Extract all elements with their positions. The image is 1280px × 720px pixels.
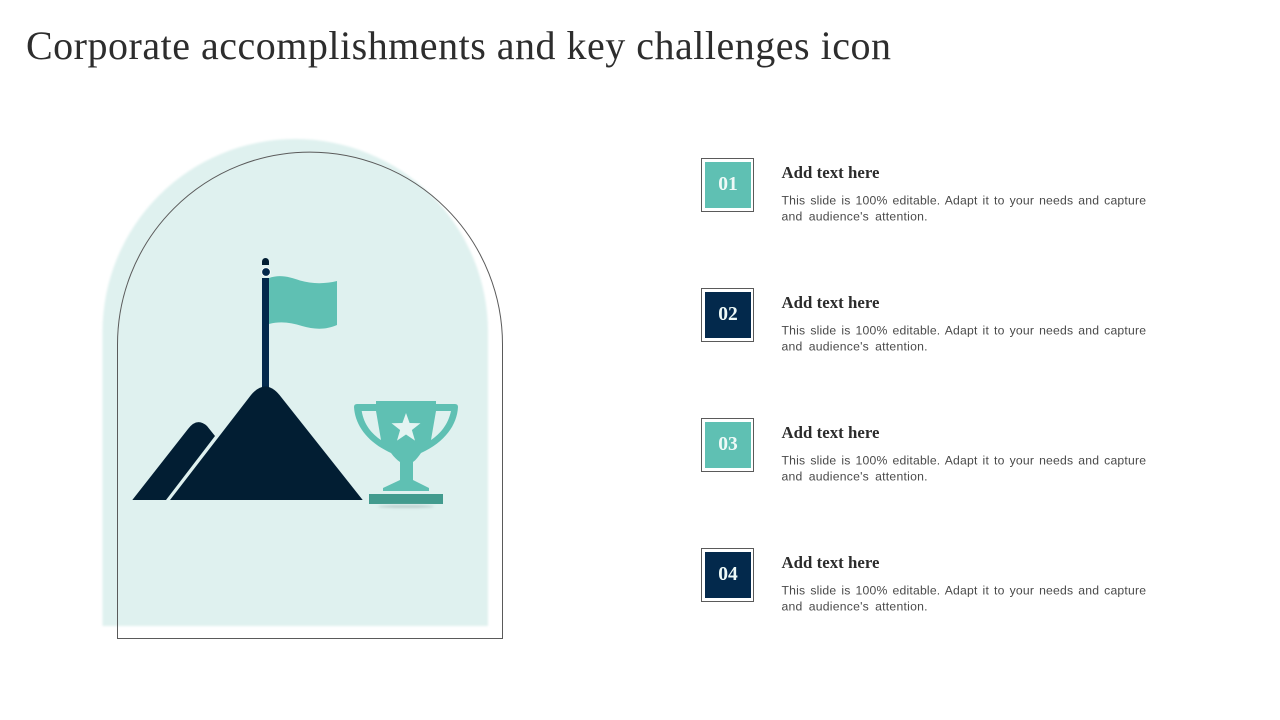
trophy star: [392, 413, 420, 441]
body text 03: This slide is 100% editable. Adapt it to your needs and capture: [782, 454, 1146, 468]
number box 02: 02: [718, 304, 738, 325]
flagpole: [262, 278, 269, 390]
heading 03: Add text here: [782, 423, 880, 442]
body text 03: and audience's attention.: [782, 470, 928, 484]
number box 01: 01: [718, 174, 738, 195]
number box 03: 03: [718, 434, 738, 455]
body text 02: This slide is 100% editable. Adapt it to your needs and capture: [782, 324, 1146, 338]
body text 01: This slide is 100% editable. Adapt it to your needs and capture: [782, 194, 1146, 208]
large mountain: [170, 386, 363, 500]
number box 04: 04: [718, 564, 738, 585]
title: Corporate accomplishments and key challenges icon: [26, 23, 891, 68]
trophy plinth: [369, 494, 443, 504]
number box 02: [702, 288, 754, 342]
body text 02: and audience's attention.: [782, 340, 928, 354]
flagpole ball: [262, 268, 270, 276]
body text 04: and audience's attention.: [782, 600, 928, 614]
icon: trophy: [354, 401, 458, 508]
arch background: [102, 139, 488, 626]
number box 03: [702, 418, 754, 472]
trophy shadow: [378, 505, 434, 508]
number box 04: [702, 548, 754, 602]
panel: arch illustration: [102, 139, 502, 638]
body text 01: [782, 194, 1146, 224]
heading 01: Add text here: [782, 163, 880, 182]
flagpole top cap: [262, 258, 269, 265]
body text 04: This slide is 100% editable. Adapt it to your needs and capture: [782, 584, 1146, 598]
list item 02: [702, 288, 1146, 354]
body text 04: [782, 584, 1146, 614]
list item 01: [702, 158, 1146, 224]
number box 01: [702, 158, 754, 212]
trophy cup, handles and stem: [354, 401, 458, 491]
arch outline: [118, 152, 502, 638]
heading 04: Add text here: [782, 553, 880, 572]
list item 04: [702, 548, 1146, 614]
flag: [269, 276, 337, 329]
list item 03: [702, 418, 1146, 484]
body text 01: and audience's attention.: [782, 210, 928, 224]
body text 02: [782, 324, 1146, 354]
icon: flag on mountain: [132, 258, 363, 500]
heading 02: Add text here: [782, 293, 880, 312]
small mountain: [132, 422, 215, 500]
body text 03: [782, 454, 1146, 484]
